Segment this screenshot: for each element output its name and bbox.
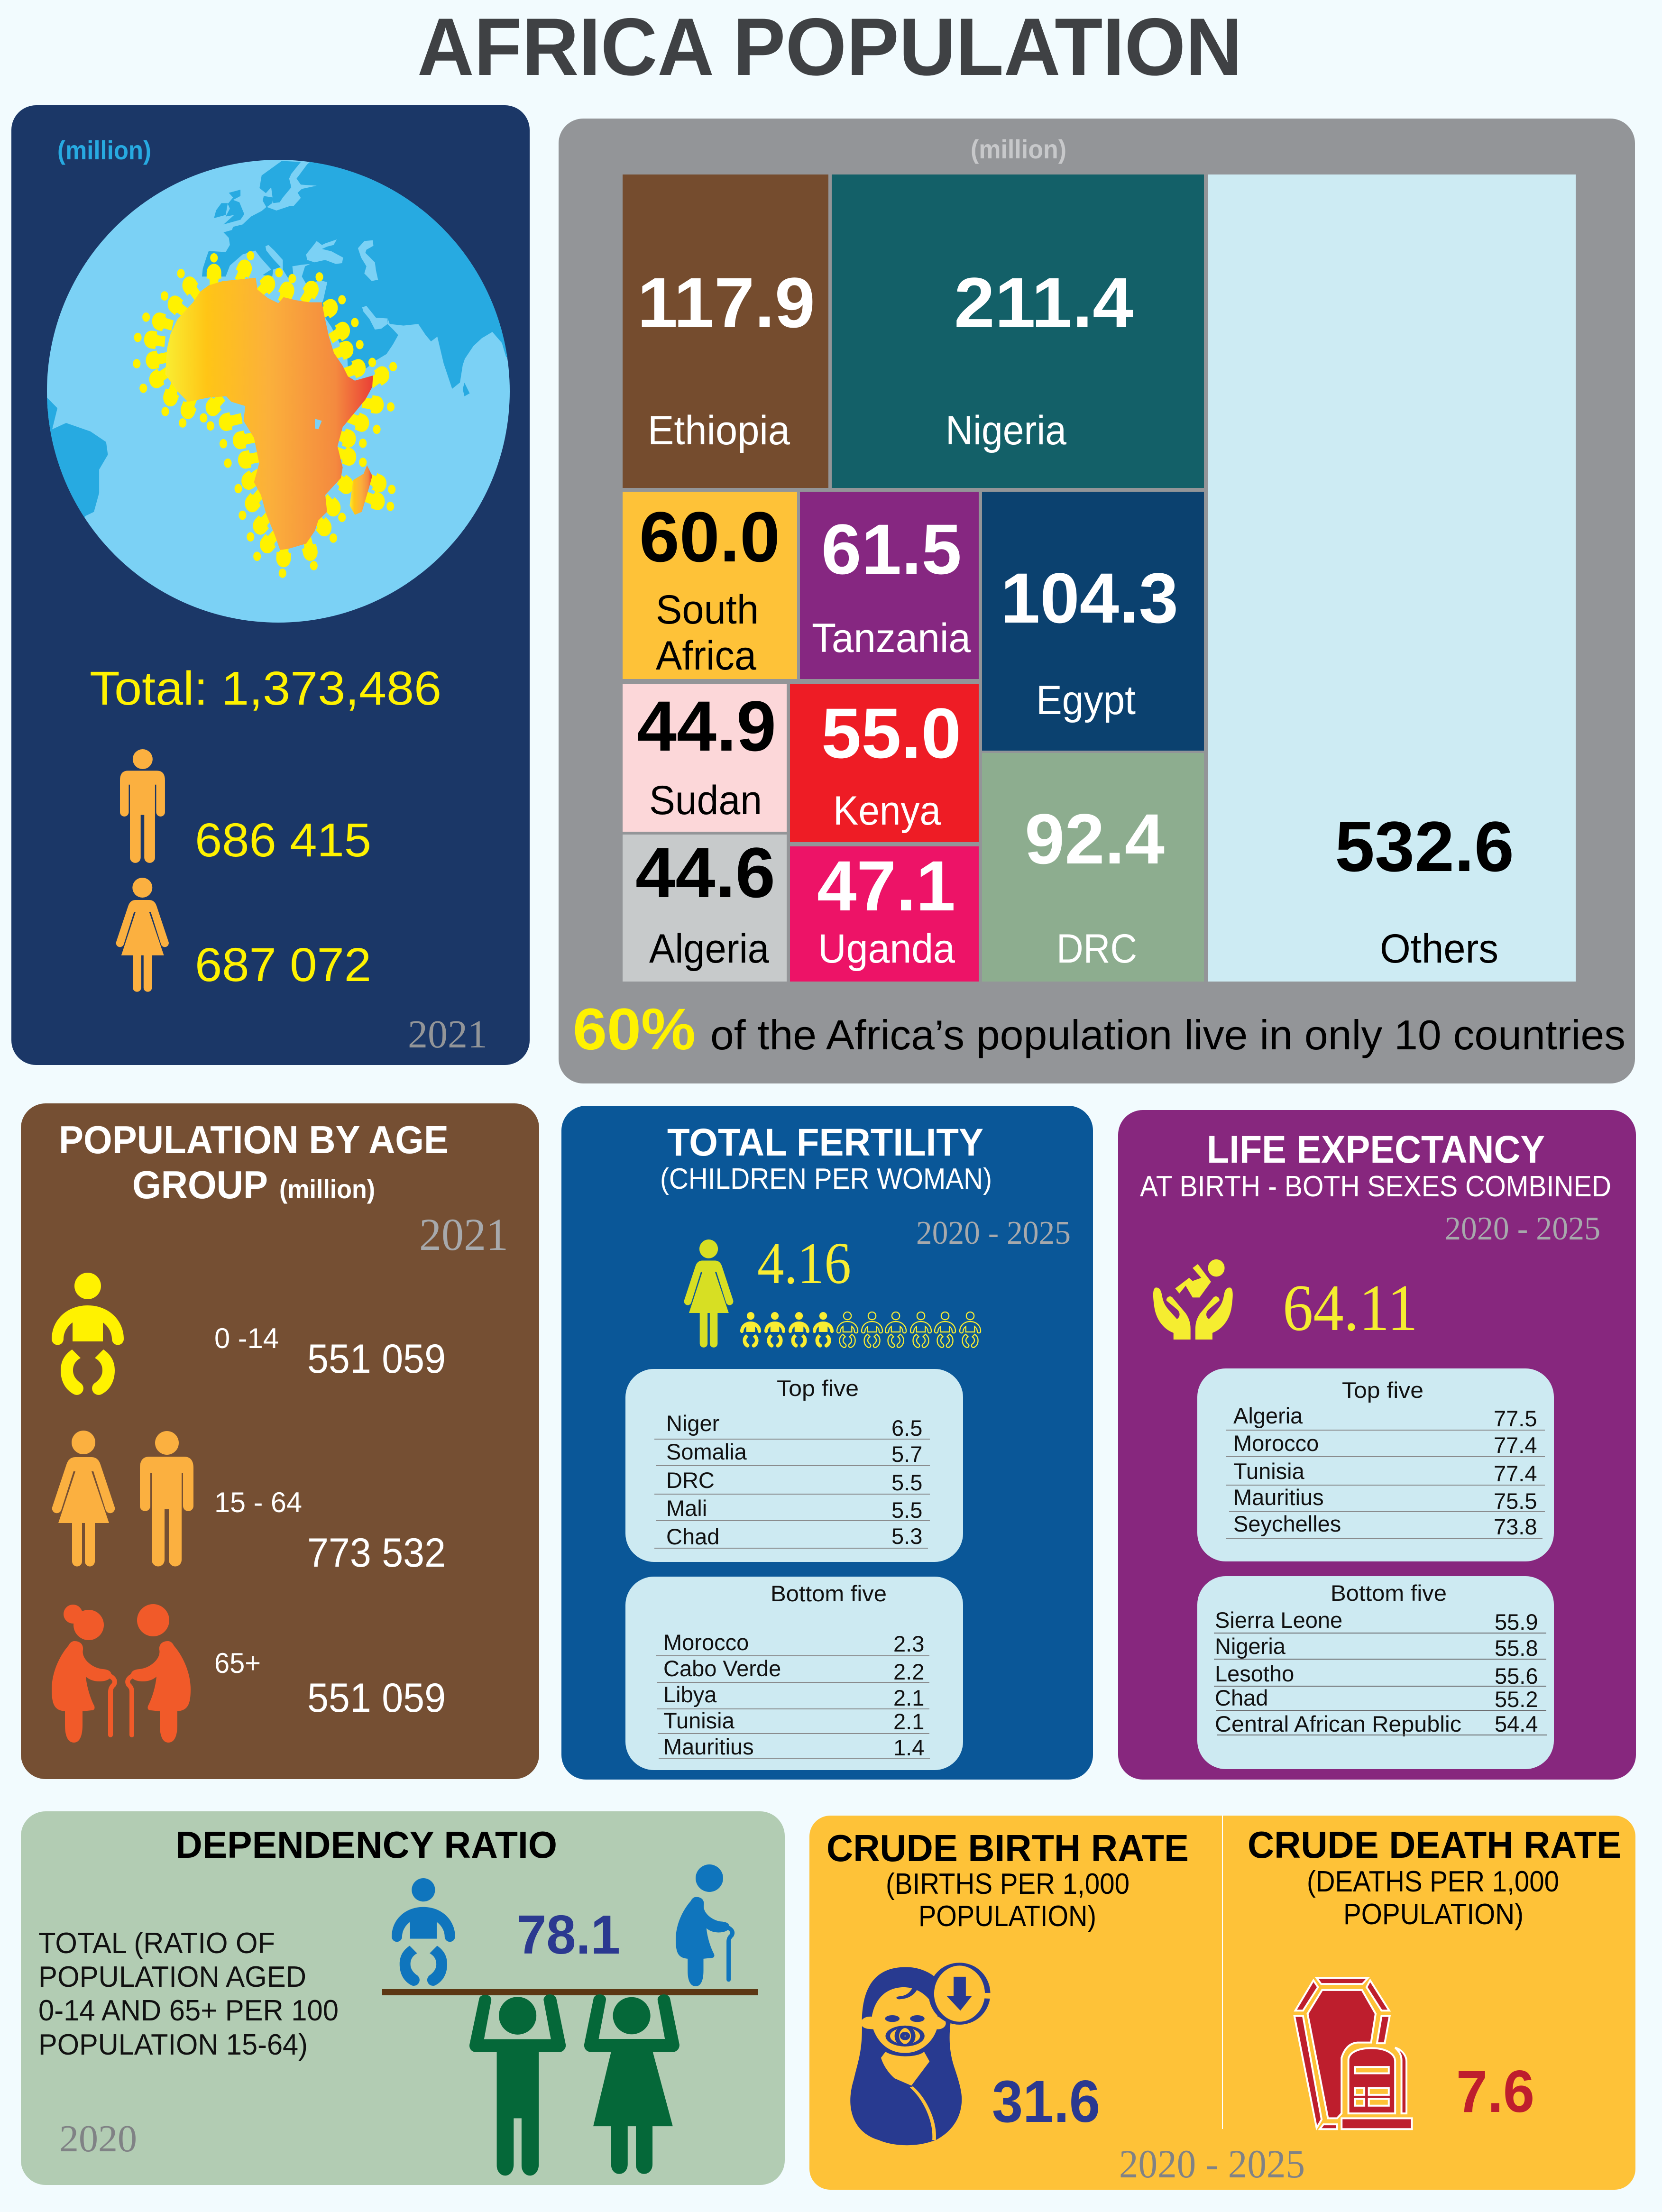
- tile: DRC: 92.4: [1025, 799, 1165, 879]
- icon: elder on beam: [676, 1864, 733, 1986]
- heading: birth rate: CRUDE BIRTH RATE: [826, 1827, 1189, 1869]
- icon: baby on beam: [392, 1878, 455, 1986]
- heading: [1140, 1128, 1611, 1203]
- table: top five life expectancy: Mauritius: [1233, 1485, 1324, 1510]
- tile: South Africa: South: [656, 587, 759, 633]
- tile: Sudan: 44.9: [637, 686, 776, 766]
- table: top five life expectancy: 73.8: [1494, 1514, 1537, 1539]
- description: POPULATION AGED: [38, 1961, 306, 1993]
- table: top five life expectancy: 77.4: [1494, 1461, 1537, 1486]
- male count: 686 415: [195, 814, 371, 867]
- icon: baby: [52, 1273, 124, 1395]
- fertility value: 4.16: [757, 1231, 851, 1296]
- tile: Nigeria: 211.4: [954, 263, 1133, 342]
- table: top five fertility: 5.5: [891, 1497, 922, 1523]
- table: top five fertility: Top five: [777, 1376, 859, 1401]
- tile: Tanzania: [800, 492, 979, 679]
- table: top five fertility: [625, 1369, 963, 1562]
- period: 2020 - 2025: [1445, 1211, 1600, 1247]
- table: top five fertility: Somalia: [666, 1439, 747, 1464]
- panel: top ten countries treemap: [559, 119, 1635, 1083]
- female count: 687 072: [195, 938, 371, 991]
- table: bottom five life expectancy: 55.9: [1495, 1609, 1538, 1634]
- period: 2020 - 2025: [1119, 2142, 1305, 2186]
- table: top five fertility: 6.5: [891, 1415, 922, 1441]
- icon: swaddled baby: [850, 1964, 988, 2145]
- tile: Egypt: [982, 492, 1204, 751]
- table: bottom five fertility: 1.4: [893, 1735, 924, 1760]
- panel: crude birth and death rates: [809, 1816, 1635, 2190]
- table: bottom five life expectancy: 54.4: [1495, 1711, 1538, 1736]
- description: POPULATION 15-64): [38, 2028, 308, 2061]
- table: top five life expectancy: Algeria: [1233, 1403, 1303, 1428]
- tile: South Africa: 60.0: [639, 497, 780, 577]
- tile: Ethiopia: 117.9: [637, 263, 815, 342]
- table: top five life expectancy: 77.4: [1494, 1432, 1537, 1458]
- table: bottom five fertility: Morocco: [663, 1630, 749, 1655]
- heading: LIFE EXPECTANCY: [1207, 1128, 1545, 1171]
- table: top five fertility: 5.7: [891, 1441, 922, 1467]
- table: bottom five fertility: Bottom five: [771, 1581, 887, 1606]
- tile: Egypt: Egypt: [1036, 678, 1136, 723]
- table: bottom five fertility: Tunisia: [663, 1708, 735, 1733]
- icon: man: [120, 749, 165, 863]
- icon: woman: [116, 878, 169, 992]
- tile: Uganda: 47.1: [817, 846, 955, 926]
- heading: death rate: CRUDE DEATH RATE: [1248, 1824, 1621, 1866]
- year: 2021: [419, 1209, 508, 1260]
- tile: Others: 532.6: [1335, 807, 1514, 886]
- table: bottom five life expectancy: Central African Republic: [1215, 1711, 1461, 1736]
- heading: POPULATION BY AGE: [59, 1118, 449, 1162]
- tile: Sudan: Sudan: [649, 778, 762, 823]
- panel: total fertility: [561, 1106, 1093, 1780]
- panel: life expectancy: [1118, 1110, 1636, 1780]
- table: top five fertility: 5.5: [891, 1470, 922, 1495]
- period: 2020 - 2025: [916, 1215, 1071, 1251]
- table: top five life expectancy: Top five: [1342, 1377, 1423, 1403]
- age group 0-14: [214, 1322, 446, 1382]
- icon: elderly couple: [52, 1604, 191, 1743]
- table: bottom five life expectancy: Nigeria: [1215, 1634, 1286, 1659]
- heading: AT BIRTH - BOTH SEXES COMBINED: [1140, 1170, 1611, 1203]
- panel: population by age group: [21, 1103, 539, 1779]
- tile: Nigeria: Nigeria: [946, 408, 1066, 453]
- heading: DEPENDENCY RATIO: [175, 1824, 557, 1866]
- tile: Sudan: [623, 684, 787, 832]
- icon: woman: [684, 1239, 733, 1348]
- table: bottom five life expectancy: Sierra Leone: [1215, 1607, 1342, 1633]
- table: top five life expectancy: Seychelles: [1233, 1511, 1341, 1536]
- title: AFRICA POPULATION: [417, 1, 1242, 92]
- unit label: (million): [57, 135, 151, 165]
- tile: Tanzania: Tanzania: [812, 615, 971, 661]
- tile: Uganda: [790, 846, 979, 982]
- table: bottom five life expectancy: [1197, 1576, 1554, 1769]
- table: bottom five fertility: Cabo Verde: [663, 1656, 781, 1681]
- panel: dependency ratio: [21, 1811, 785, 2185]
- table: top five life expectancy: 77.5: [1494, 1406, 1537, 1431]
- age group 0-14: 551 059: [307, 1336, 446, 1382]
- tile: Ethiopia: Ethiopia: [648, 408, 790, 453]
- table: top five fertility: DRC: [666, 1468, 715, 1493]
- tile: Kenya: 55.0: [821, 693, 961, 773]
- heading: death rate: POPULATION): [1343, 1898, 1524, 1931]
- table: top five life expectancy: 75.5: [1494, 1488, 1537, 1514]
- year: 2020: [59, 2118, 137, 2160]
- tile: South Africa: Africa: [656, 633, 756, 679]
- table: bottom five life expectancy: Bottom five: [1331, 1580, 1447, 1606]
- heading: death rate: (DEATHS PER 1,000: [1307, 1865, 1559, 1898]
- tile: Ethiopia: [623, 174, 828, 488]
- age group 65+: 551 059: [307, 1675, 446, 1721]
- tile: Nigeria: [832, 174, 1204, 488]
- heading: [59, 1118, 449, 1207]
- table: bottom five fertility: 2.2: [893, 1659, 924, 1684]
- year: 2021: [408, 1012, 487, 1056]
- table: top five life expectancy: [1197, 1368, 1554, 1561]
- globe with Africa: [47, 160, 510, 623]
- tile: Algeria: 44.6: [635, 833, 775, 912]
- heading: death rate: [1248, 1824, 1621, 1931]
- table: top five fertility: Mali: [666, 1496, 707, 1521]
- tile: Tanzania: 61.5: [821, 509, 962, 589]
- table: top five life expectancy: Morocco: [1233, 1431, 1319, 1456]
- ratio value: 78.1: [517, 1904, 620, 1965]
- icon row: children: [740, 1312, 981, 1348]
- tile: Others: Others: [1380, 926, 1498, 972]
- table: bottom five fertility: 2.3: [893, 1631, 924, 1656]
- panel: total population globe: [11, 105, 530, 1065]
- description: TOTAL (RATIO OF: [38, 1927, 275, 1960]
- table: bottom five life expectancy: 55.2: [1495, 1687, 1538, 1712]
- tile: Others: [1208, 174, 1576, 982]
- icon: adults: [52, 1431, 193, 1567]
- heading: [660, 1121, 992, 1195]
- icon: hands holding baby: [1153, 1259, 1233, 1340]
- description: [38, 1927, 339, 2061]
- table: top five fertility: 5.3: [891, 1524, 922, 1549]
- tile: DRC: [982, 753, 1204, 982]
- table: top five fertility: Niger: [666, 1411, 719, 1436]
- age group 65+: [214, 1647, 446, 1721]
- heading: GROUP: [132, 1163, 268, 1207]
- tile: Egypt: 104.3: [1001, 558, 1178, 638]
- tile: South Africa: [623, 492, 797, 679]
- life expectancy value: 64.11: [1283, 1271, 1418, 1345]
- heading: birth rate: POPULATION): [918, 1900, 1096, 1933]
- table: bottom five fertility: Libya: [663, 1682, 717, 1707]
- tile: Kenya: [790, 684, 979, 842]
- age group 15-64: [214, 1487, 446, 1576]
- callout: 60 percent: [573, 997, 1625, 1062]
- age group 65+: 65+: [214, 1647, 261, 1679]
- tile: DRC: DRC: [1056, 926, 1137, 972]
- total figure: Total: 1,373,486: [90, 662, 441, 715]
- callout: 60 percent: 60%: [573, 997, 696, 1062]
- beam: [382, 1989, 758, 1995]
- small people around the coast: [137, 256, 393, 573]
- table: top five fertility: Chad: [666, 1524, 719, 1549]
- heading: birth rate: [826, 1827, 1189, 1933]
- tile: Algeria: [623, 833, 787, 982]
- tile: Kenya: Kenya: [833, 788, 941, 834]
- icon: adults lifting beam: [469, 1994, 679, 2175]
- table: bottom five fertility: 2.1: [893, 1685, 924, 1710]
- table: top five life expectancy: Tunisia: [1233, 1459, 1305, 1484]
- death rate value: 7.6: [1456, 2059, 1534, 2125]
- table: bottom five life expectancy: Lesotho: [1215, 1661, 1294, 1686]
- age group 15-64: 773 532: [307, 1530, 446, 1576]
- description: 0-14 AND 65+ PER 100: [38, 1994, 339, 2027]
- table: bottom five life expectancy: 55.8: [1495, 1635, 1538, 1661]
- heading: (CHILDREN PER WOMAN): [660, 1163, 992, 1195]
- table: bottom five fertility: Mauritius: [663, 1734, 754, 1759]
- table: bottom five fertility: 2.1: [893, 1709, 924, 1734]
- table: bottom five life expectancy: Chad: [1215, 1685, 1268, 1710]
- birth rate value: 31.6: [992, 2069, 1100, 2135]
- table: bottom five life expectancy: 55.6: [1495, 1663, 1538, 1689]
- heading: (million): [279, 1174, 375, 1204]
- icon: coffin and tombstone: [1295, 1978, 1412, 2129]
- age group 0-14: 0 -14: [214, 1322, 279, 1354]
- age group 15-64: 15 - 64: [214, 1487, 302, 1518]
- heading: birth rate: (BIRTHS PER 1,000: [886, 1868, 1129, 1900]
- callout: 60 percent: of the Africa’s population live in only 10 countries: [710, 1011, 1625, 1058]
- table: bottom five fertility: [625, 1577, 963, 1770]
- tile: Algeria: Algeria: [649, 926, 769, 972]
- heading: TOTAL FERTILITY: [667, 1121, 983, 1164]
- tile: Uganda: Uganda: [818, 926, 955, 972]
- unit label: (million): [971, 134, 1066, 164]
